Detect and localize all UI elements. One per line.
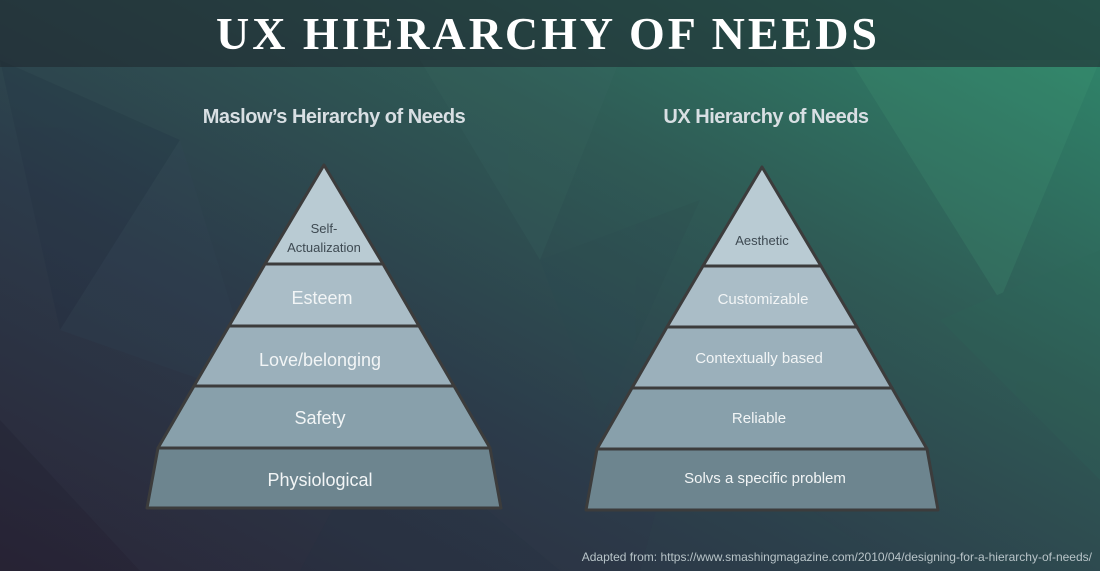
pyramid: Maslow: Esteem: [291, 288, 353, 308]
pyramid: Maslow: [147, 165, 501, 508]
title bar: [0, 0, 1100, 67]
source credit: Adapted from: https://www.smashingmagazine.com/2010/04/designing-for-a-hierarchy-of-needs/: [582, 550, 1093, 564]
pyramid: Maslow: Actualization: [287, 240, 361, 255]
heading: Maslow: Maslow’s Heirarchy of Needs: [203, 106, 466, 128]
pyramid: UX: [586, 167, 938, 510]
pyramid: Maslow: Physiological: [267, 470, 373, 490]
pyramid: Maslow: Self-: [311, 221, 337, 236]
pyramid: UX: Solvs a specific problem: [684, 470, 846, 487]
title bar: UX HIERARCHY OF NEEDS: [216, 8, 880, 59]
heading: UX: UX Hierarchy of Needs: [663, 106, 869, 128]
pyramid: UX: Contextually based: [695, 350, 823, 367]
pyramid: UX: Reliable: [732, 410, 786, 427]
pyramid: UX: Aesthetic: [735, 233, 789, 248]
pyramid: Maslow: Love/belonging: [259, 350, 381, 370]
pyramid: UX: Customizable: [718, 291, 808, 308]
pyramid: Maslow: Safety: [294, 408, 346, 428]
